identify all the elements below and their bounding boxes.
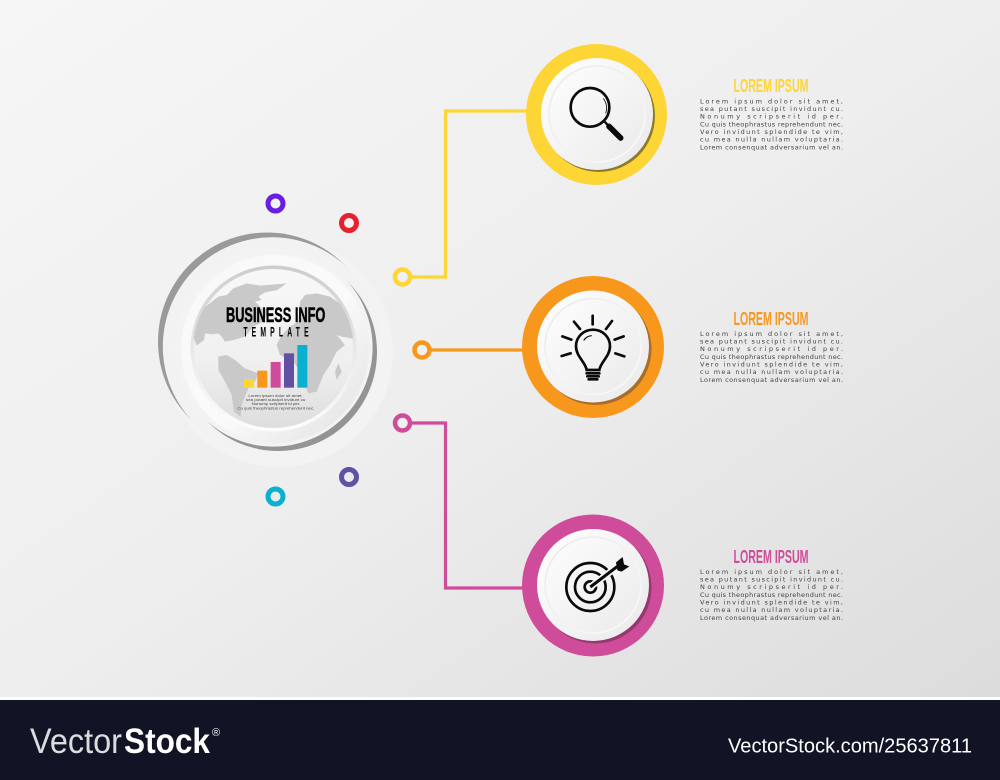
body text 1: cu mea nulla nullam voluptaria. [700, 136, 843, 144]
body text 3 [700, 568, 843, 622]
body text 3: Cu quis theophrastus reprehendunt nec. [700, 591, 843, 599]
step 1 button: yellow [526, 44, 667, 185]
central globe badge [158, 232, 377, 451]
caption: Nonumy scripserit id per. [252, 402, 300, 406]
world map and content [192, 283, 355, 417]
decorative dot: purple [268, 196, 283, 211]
world map [192, 283, 355, 417]
footer logo [30, 722, 220, 761]
title: BUSINESS INFO [226, 302, 325, 327]
body text 1 [700, 97, 843, 151]
decorative dot: red [342, 216, 356, 230]
body text 3: Nonumy scripserit id per. [700, 583, 843, 591]
caption: Cu quis theophrastus reprehendunt nec. [237, 406, 314, 410]
body text 2: Lorem ipsum dolor sit amet, [700, 330, 843, 338]
body text 2: cu mea nulla nullam voluptaria. [700, 368, 843, 376]
text block 1 [700, 75, 843, 151]
footer logo: Stock [124, 722, 210, 761]
footer logo: Vector [30, 722, 122, 761]
connector: pink [395, 416, 526, 588]
icon: magnifying glass [571, 88, 621, 138]
text block 2 [700, 308, 843, 384]
body text 2: Lorem consenquat adversarium vel an. [700, 376, 843, 384]
connector: yellow [395, 111, 530, 284]
bar chart [244, 345, 307, 388]
decorative dot: violet [342, 470, 356, 484]
body text 1: Cu quis theophrastus reprehendunt nec. [700, 120, 843, 128]
icon: target with arrow [566, 557, 629, 611]
body text 2: Vero invidunt splendide te vim, [700, 360, 843, 368]
text block 3 [700, 546, 843, 622]
footer image id: VectorStock.com/25637811 [728, 736, 972, 758]
decorative dot: cyan [268, 489, 283, 504]
body text 3: cu mea nulla nullam voluptaria. [700, 606, 843, 614]
footer bar [0, 700, 1000, 780]
step 3 button: pink [522, 514, 664, 656]
connector: orange [414, 342, 526, 358]
body text 1: sea putant suscipit invidunt cu. [700, 105, 843, 113]
caption: Lorem ipsum dolor sit amet, [248, 394, 303, 398]
caption: sea putant suscipit invidunt cu [246, 398, 305, 402]
body text 1: Lorem consenquat adversarium vel an. [700, 143, 843, 151]
icon: light bulb [562, 316, 624, 379]
subtitle: TEMPLATE [243, 325, 309, 340]
caption [237, 394, 314, 410]
body text 3: Lorem consenquat adversarium vel an. [700, 614, 843, 622]
body text 3: Lorem ipsum dolor sit amet, [700, 568, 843, 576]
body text 3: sea putant suscipit invidunt cu. [700, 576, 843, 584]
body text 1: Vero invidunt splendide te vim, [700, 128, 843, 136]
body text 1: Nonumy scripserit id per. [700, 113, 843, 121]
heading 1: LOREM IPSUM [734, 75, 808, 96]
body text 2: Nonumy scripserit id per. [700, 345, 843, 353]
body text 2 [700, 330, 843, 384]
body text 3: Vero invidunt splendide te vim, [700, 598, 843, 606]
step 2 button: orange [522, 276, 664, 418]
heading 3: LOREM IPSUM [734, 546, 808, 567]
body text 1: Lorem ipsum dolor sit amet, [700, 97, 843, 105]
body text 2: Cu quis theophrastus reprehendunt nec. [700, 353, 843, 361]
footer logo: ® [212, 727, 220, 739]
heading 2: LOREM IPSUM [734, 308, 808, 329]
body text 2: sea putant suscipit invidunt cu. [700, 338, 843, 346]
